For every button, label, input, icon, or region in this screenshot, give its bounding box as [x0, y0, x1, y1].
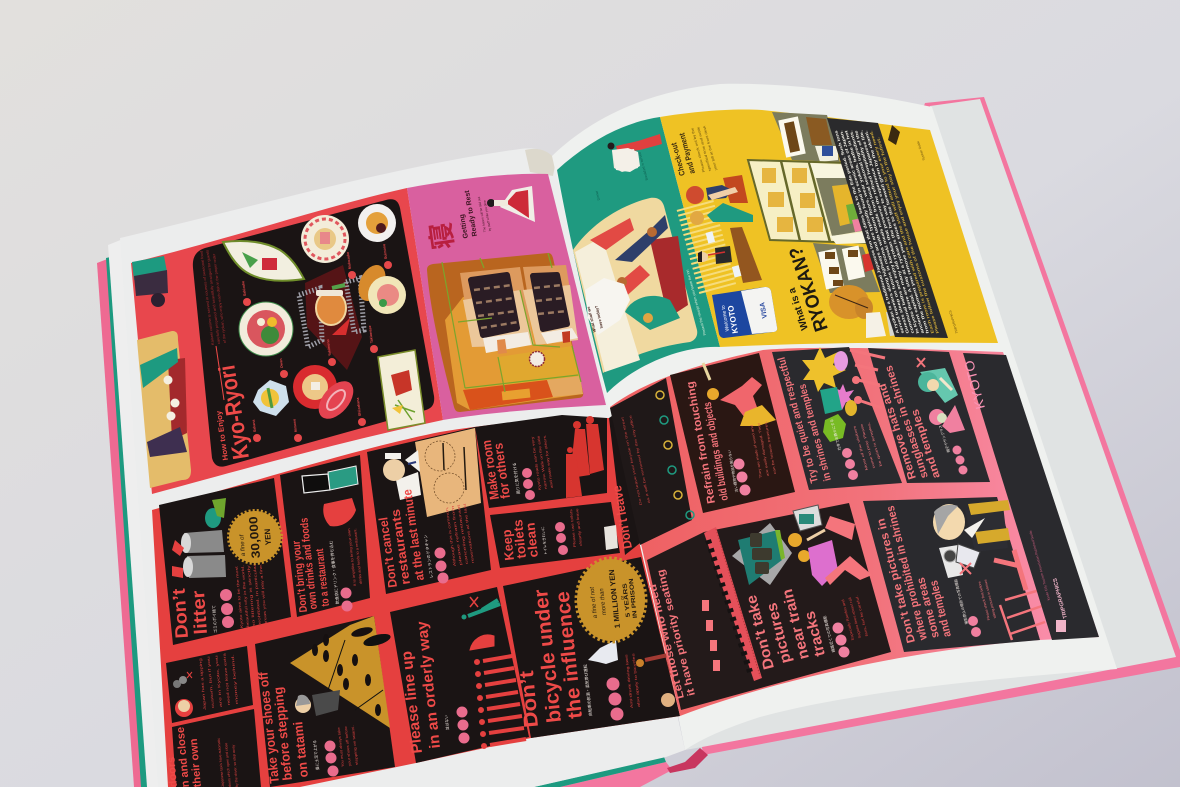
heading: let those who need [647, 568, 698, 700]
futon left [471, 275, 518, 335]
menu numbered captions: Mukozuke [346, 252, 352, 269]
rating faces [555, 522, 568, 555]
cross mark [917, 358, 925, 367]
fine badge: a fine of not [590, 586, 599, 618]
card: kyoto colophon [961, 353, 1099, 640]
futon right [533, 275, 567, 329]
body text: doors which open and close [224, 743, 232, 787]
intro text block: of the ryokan, who enjoy each dish in the proper order [212, 253, 227, 343]
dark description panel: A ryokan is a traditional Japanese inn that dates back to the Edo period. Such inns [833, 129, 900, 334]
heading: Don’t bring your [290, 539, 310, 613]
body text: your shoes off before [344, 726, 352, 766]
menu numbered captions: Sakana [251, 418, 257, 432]
body text: beautiful city in the world, [241, 565, 250, 627]
heading [290, 517, 332, 613]
body text [235, 563, 268, 628]
heading: n and close [175, 726, 192, 787]
tripgraphics logo: TRIPGRAPHICS [1052, 577, 1069, 619]
japanese caption and rating: 並ばない [443, 715, 450, 730]
panel: what is a ryokan [660, 109, 998, 347]
heading: how to enjoy kyo-ryori: How to Enjoy [214, 409, 230, 461]
body text [569, 508, 583, 547]
body text [445, 503, 475, 566]
menu numbered captions: Suimono [382, 243, 388, 259]
icon: vase struck by spark [703, 363, 776, 426]
menu numbered captions [241, 243, 392, 442]
body text: money behind. [231, 654, 239, 704]
heading: how to enjoy kyo-ryori: Kyo-Ryori [213, 363, 254, 461]
icon: bottle and vessel [302, 466, 358, 526]
illustration: tatami dining scene: have today? [593, 305, 604, 329]
heading: check-out and payment: and Payment [677, 132, 697, 175]
icon: priority seat figures [702, 600, 720, 671]
icon: speech shapes [820, 351, 857, 442]
body text: custom, but if you [206, 656, 215, 708]
heading: don't take pictures near train tracks: tracks [801, 609, 829, 658]
icon: toilet [604, 525, 618, 550]
speech cloud [612, 148, 640, 172]
body text: Sagano lines attract rail [848, 597, 862, 639]
check-out body text [690, 125, 718, 173]
body text: narrow. Walk on the side [537, 435, 548, 489]
body text: They are made of wood and [750, 425, 763, 479]
credits: Kyoto City Tourism Association Published Guide [1028, 530, 1051, 601]
heading: check-out and payment: Check-out [669, 141, 687, 177]
heading: on tatami [290, 721, 311, 778]
dark description panel: Guests sleep on futons in rooms with tatami floors, wear yukata, bathe in hot [843, 129, 910, 334]
body text: as it will be removed by the city office [628, 415, 651, 504]
heading: Try to be quiet and respectful [776, 356, 821, 484]
heading: getting ready to rest: Getting [459, 214, 470, 239]
body text: can be historic treasures. [764, 421, 777, 475]
card: small tip [166, 646, 253, 723]
card: don't litter [159, 478, 291, 645]
body text: so littering is strictly [247, 565, 256, 627]
body text [750, 421, 777, 479]
menu numbered captions: Takiawase [368, 325, 374, 343]
panel: etiquette lower left page [152, 400, 688, 787]
icon: line cutter with cross [462, 597, 500, 620]
japanese caption and rating: 飲食店にドリンク・食事を持ち込む [327, 540, 340, 605]
tree [829, 285, 869, 319]
body text: Anti-drunk driving laws [624, 654, 634, 708]
body text: Please use toilets [569, 509, 577, 547]
rating faces [522, 468, 535, 500]
fine badge [229, 511, 281, 563]
left white page [120, 148, 685, 787]
body text: Do not leave your bicycle on the street [620, 417, 643, 506]
icon: torii gate [994, 550, 1045, 640]
body text: getting ready [477, 196, 492, 233]
check-out body text: Please check out by the [690, 127, 706, 173]
illustration: tourist with pink hat [929, 405, 965, 433]
heading [169, 588, 211, 639]
heading: and temples [909, 408, 943, 480]
card: please line up [390, 587, 529, 763]
fine badge: a fine of [239, 533, 247, 556]
body text: Japan has a tipping [198, 658, 207, 710]
illustration: reception [686, 175, 762, 290]
icon: litter bins [172, 498, 226, 578]
japanese caption and rating [327, 540, 352, 612]
menu numbered captions: Owan [279, 358, 284, 368]
heading: check-out and payment [669, 132, 697, 177]
heading: sunglasses in shrines [883, 364, 931, 480]
heading: to a restaurant [314, 548, 332, 607]
body text: cleanly and leave [575, 508, 583, 546]
credit and small icon [888, 125, 959, 334]
heading: doors [165, 756, 180, 787]
body text: prohibited. In particular [252, 563, 262, 626]
icon: bicycle rack [656, 391, 694, 519]
dish: grilled on net [299, 265, 364, 370]
heading: don't take pictures near train tracks: pictures [763, 601, 795, 665]
card: try to be quiet [772, 347, 902, 490]
japanese caption: トイレをきれいに [540, 526, 548, 555]
heading: old buildings and objects [702, 401, 731, 502]
japanese caption and rating: 古い建物や物品を触らない [727, 449, 739, 493]
body text on teal: Dinner [594, 189, 601, 201]
illustration: tatami dining scene: What shall we [586, 305, 597, 333]
dish: octagon cup [253, 380, 289, 416]
illustration: tatami room [427, 253, 583, 412]
body text: please refrain from [451, 505, 463, 565]
illustration: noisy tourists [850, 350, 885, 408]
dark description panel: communal baths and enjoy kaiseki meals made from local seasonal ingredients. [848, 130, 915, 334]
heading: don't take pictures near train tracks [743, 587, 829, 671]
heading: Don’t take pictures in [875, 517, 918, 644]
panel: getting ready to rest [407, 174, 606, 420]
heading: Don’t cancel [376, 516, 400, 589]
body text on teal: Breakfast is served [638, 152, 649, 181]
fine badge: 1 MILLION YEN [607, 569, 622, 629]
heading: and temples [928, 579, 954, 638]
illustration: bowing red figure [608, 134, 662, 172]
body text [337, 725, 359, 767]
japanese caption and rating: 撮影禁止の場所での写真撮影 [953, 578, 969, 625]
illustration: tatami with footprints [290, 616, 392, 728]
illustration: tatami dining scene [573, 198, 697, 373]
body text [841, 595, 869, 641]
heading: the influence [552, 590, 587, 720]
body text: Most of the visitors [852, 425, 869, 471]
card: don't leave [609, 400, 688, 555]
body text: Especially Randen and [841, 599, 855, 641]
illustration: queue of people [470, 635, 526, 748]
panel: right page top teal checkout section [557, 117, 720, 393]
check-out body text: specified time and settle [696, 126, 712, 172]
card: remove hats [868, 348, 990, 483]
body text: reservations at the last [463, 503, 475, 563]
card: open and close doors [165, 709, 261, 787]
heading: their own [188, 738, 204, 787]
body text: are easily damaged. They [757, 422, 770, 477]
caption on teal: Present the receipt when you leave the inn [686, 269, 707, 336]
heading: Keep [499, 529, 517, 561]
body text: getting ready: The futons will be laid out [477, 196, 487, 233]
japanese caption and rating [582, 664, 624, 720]
body text: canceling restaurant [457, 504, 469, 564]
heading: before stepping [270, 686, 295, 781]
card: don't cancel restaurants [367, 427, 491, 594]
right page block edge [685, 99, 1176, 750]
japanese caption and rating: 畳に土足で上がる [312, 739, 320, 770]
japanese caption and rating: 線路近くでの写真撮影 [822, 615, 836, 653]
body text: Although this is common, [445, 506, 457, 566]
illustration: tourist with hat [918, 368, 958, 403]
dish: small bowl [358, 204, 396, 242]
body text: be quiet in temples. [866, 421, 883, 467]
heading [165, 726, 204, 787]
heading: clean [522, 522, 541, 558]
body text: taking pictures in shrines [983, 579, 997, 619]
heading [877, 364, 943, 481]
heading: Please line up [398, 650, 426, 754]
body text: Kyoto aims to be the most [235, 566, 244, 628]
right white page [552, 84, 1117, 750]
illustration: dining scene [137, 331, 191, 488]
body text: drinks and foods to a restaurant. [353, 528, 363, 584]
heading [398, 620, 444, 754]
check-out body text: your bill at the front desk [702, 125, 718, 171]
body text on teal [594, 152, 649, 201]
panel: how to enjoy kyo-ryori [131, 174, 606, 494]
fine badge: more than [599, 587, 608, 615]
heading [516, 588, 587, 728]
dish: rectangular tray [378, 350, 425, 430]
icon: welcome to kyoto credit card [712, 287, 777, 338]
card: don't bicycle under the influence [503, 557, 680, 738]
menu numbered captions: Shiizakana [356, 396, 362, 416]
icon: phone photographers [788, 505, 872, 586]
dark description panel [827, 118, 948, 338]
icon: welcome to kyoto credit card: Welcome to [720, 305, 731, 332]
card: don't take pictures in shrines [863, 497, 1045, 652]
icon: kanji sign: 寝 [425, 220, 459, 251]
fine badge: 30,000 [246, 516, 263, 559]
speech bubble [585, 278, 630, 335]
menu numbered captions: Yakimono [326, 338, 332, 356]
heading [255, 671, 311, 784]
heading: toilets [510, 519, 529, 559]
heading: at the last minute [400, 488, 427, 582]
fine badge: IN PRISON [629, 578, 639, 618]
japanese caption and rating: 自転車の飲酒・酒気帯び運転 [582, 664, 593, 717]
intro text block: Kaiseki cuisine is served in courses of seasonal food [199, 251, 215, 345]
dark description panel: served travelers along highways and are typically found in scenic areas of Japan. [838, 130, 905, 334]
heading: don't take pictures near train tracks: near train [779, 587, 813, 661]
body text: come to pray. Please [859, 423, 876, 469]
heading: bicycle under [530, 588, 566, 724]
heading: own drinks and foods [298, 517, 320, 610]
heading: Refrain from touching [685, 380, 718, 505]
card: make room for others [475, 415, 607, 508]
card: refrain from touching [670, 353, 795, 513]
heading: getting ready to rest: Ready to Rest [464, 189, 479, 237]
body text: and make way for others. [543, 434, 554, 488]
japanese caption and rating [822, 615, 850, 658]
card: don't leave and seating [610, 378, 694, 545]
heading: what is a ryokan: What is a [787, 286, 811, 331]
heading: restaurants [389, 508, 413, 586]
credit and small icon: Ryokan Guide [916, 140, 926, 161]
heading: don't take pictures near train tracks: Don’t take [743, 593, 778, 671]
fine badge: 5 YEARS [622, 583, 632, 617]
japanese caption and rating [443, 706, 470, 744]
intro text block: carefully prepared and beautifully arranged for guests [205, 249, 221, 344]
heading: Don’t [516, 669, 543, 728]
panel: black menu card [193, 199, 434, 467]
heading: where prohibited in shrines [885, 504, 930, 642]
body text: stepping on tatami. [351, 725, 359, 765]
heading [499, 519, 541, 561]
illustration: crowd silhouettes [566, 416, 604, 498]
body text [852, 421, 883, 471]
japanese caption and rating [727, 449, 750, 496]
dark description panel: from the moment you remove your shoes to the farewell given by the okami. [863, 130, 930, 334]
fine badge: or [620, 595, 626, 600]
dish: red lacquer bowls [293, 365, 360, 425]
japanese caption and rating [312, 739, 338, 776]
heading [776, 356, 834, 484]
menu numbered captions: Sakizuke [241, 281, 247, 296]
illustration: old man [295, 690, 340, 716]
heading: some areas [915, 576, 942, 639]
heading [685, 380, 731, 505]
japanese caption and rating: 帽子やサングラス [937, 424, 951, 453]
icon: welcome to kyoto credit card: KYOTO [726, 305, 740, 334]
body text: It is impolite to bring your own [347, 528, 357, 586]
japanese caption and rating [829, 418, 858, 480]
icon: welcome to kyoto credit card: VISA [759, 302, 769, 319]
illustration: ryokan building [748, 112, 900, 338]
heading: in shrines and temples [796, 383, 834, 482]
body text: Please check first before [977, 581, 991, 621]
left page block edge [108, 237, 168, 787]
icon: yellow burst [802, 347, 846, 392]
intro text block [199, 249, 227, 345]
body text: Japanese taxis have automatic [217, 738, 225, 787]
illustration: cyclist [636, 655, 675, 707]
dish: salad plate [239, 302, 293, 356]
card: let those and train tracks [647, 503, 891, 710]
card: don't leave: Don’t leave [609, 484, 635, 550]
heading: Take your shoes off [255, 671, 282, 784]
body text [624, 653, 641, 708]
illustration: figure at the bed [487, 186, 535, 222]
illustration: wooden counter with reservations [415, 428, 481, 517]
japanese caption: 周りに気を付ける [511, 462, 521, 495]
gutter cream shading [525, 149, 556, 176]
card: take your shoes off [255, 616, 395, 787]
body text [977, 579, 997, 621]
brand: KYOTO [961, 359, 988, 411]
body text: areas you will pay a fine. [259, 563, 268, 625]
japanese caption and rating [422, 534, 448, 584]
rating faces [220, 589, 234, 628]
body text [347, 528, 363, 586]
heading: let those who need: it have priority seating [655, 568, 698, 697]
panel: etiquette lower right page [610, 347, 1099, 716]
body text [217, 738, 239, 787]
body text: also apply to bicycles [631, 653, 641, 707]
heading: for others [490, 442, 513, 500]
heading: Don’t [169, 588, 192, 639]
icon: face with cross [173, 672, 193, 717]
dish: twin small plates [353, 261, 406, 314]
body text [620, 415, 651, 506]
heading: Remove hats and [877, 382, 919, 481]
japanese caption and rating: 社寺でお静かにする [829, 418, 842, 451]
body text: need not leave extra [222, 653, 231, 705]
body text [530, 434, 554, 490]
dark description panel: Each room is prepared with care and the staff will attend to your every need. [868, 130, 935, 334]
heading [875, 504, 954, 644]
card: don't bring your own drinks [280, 455, 370, 617]
heading: in an orderly way [414, 620, 444, 749]
body text [198, 653, 239, 710]
japanese caption: ゴミのポイ捨て [210, 605, 218, 633]
japanese caption and rating: レストランのドタキャン [422, 534, 434, 579]
body text: getting ready: by staff while you dine [483, 200, 492, 232]
illustration: kimono figure top left [132, 256, 168, 307]
card: keep toilets clean [490, 502, 620, 568]
dish: leaf plate [223, 241, 304, 281]
body text: Kyoto roads can be very [530, 436, 542, 490]
dark description panel: In Kyoto there are many old ryokan that preserve the refined hospitality of the [853, 129, 920, 334]
icon: train [732, 523, 792, 585]
dark description panel: Please follow the customs of the house and enjoy your stay to the fullest. [875, 137, 940, 334]
fine badge [577, 559, 645, 641]
body text: by the driver, so step away [231, 744, 239, 787]
body text: are in Kyoto, you [214, 655, 223, 707]
heading: Make room [479, 439, 502, 501]
illustration: old monk [933, 500, 1010, 552]
fine badge: YEN [263, 528, 273, 545]
dish: round sashimi plate [301, 215, 349, 263]
heading: let those who need: Let those who need [647, 583, 687, 700]
heading [479, 439, 513, 501]
dark description panel: ancient capital. A stay at a ryokan is the best way to experience Japanese life, [858, 130, 925, 334]
credit and small icon: TRIPGRAPHICS [948, 310, 959, 334]
japanese caption and rating [953, 578, 981, 637]
icon: camera and tablet with cross [939, 544, 980, 578]
icon: sake bottle [588, 640, 618, 664]
heading: what is a ryokan: RYOKAN? [786, 244, 833, 334]
heading [376, 488, 427, 589]
body text: You must always take [337, 727, 345, 767]
illustration: waiter [383, 450, 421, 500]
body text: fans, but be careful. [855, 595, 869, 637]
heading: litter [188, 590, 211, 635]
menu numbered captions: Nimono [292, 418, 298, 432]
train track strip [704, 527, 762, 681]
